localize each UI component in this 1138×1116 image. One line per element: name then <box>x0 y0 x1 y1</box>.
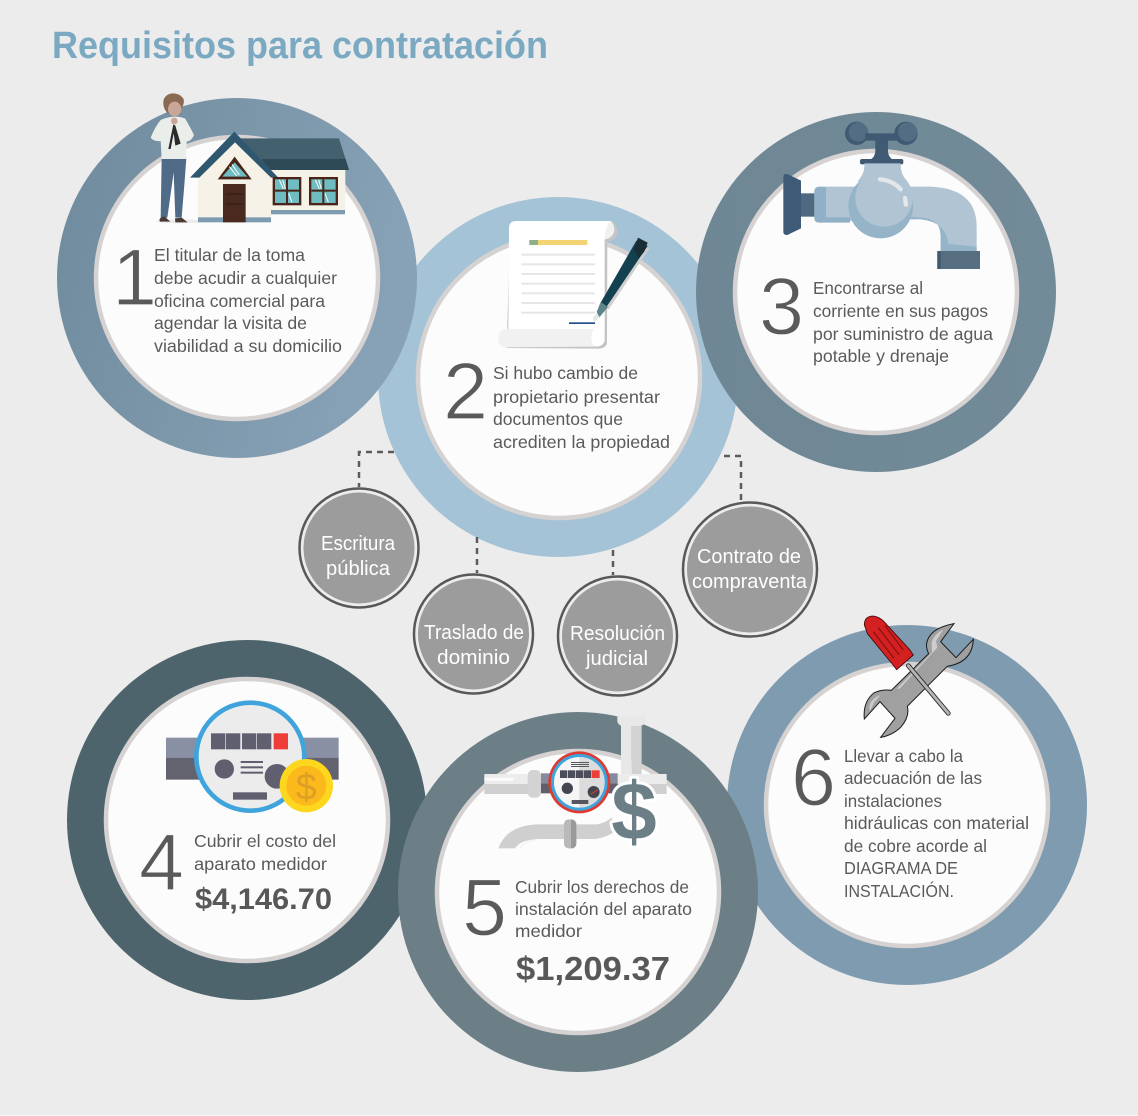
text: step 3: Encontrarse al <box>813 278 923 298</box>
icon: meter, pipes and dollar sign <box>484 717 667 858</box>
text: step 5: instalación del aparato <box>515 899 692 919</box>
text: step 4 <box>194 831 336 874</box>
price: step 4: $4,146.70 <box>195 883 332 916</box>
text: step 1 <box>154 245 342 356</box>
panel: step 4 <box>67 640 427 1000</box>
number 1: 1 <box>112 233 157 323</box>
disc: step 6 <box>766 664 1048 946</box>
text: step 6 <box>844 746 1029 901</box>
bubble: Contrato de compraventa: Contrato de <box>697 546 801 568</box>
bubble: Resolución judicial: judicial <box>585 648 648 670</box>
text: step 1: viabilidad a su domicilio <box>154 336 342 356</box>
text: step 2: propietario presentar <box>493 387 660 407</box>
text: step 6: DIAGRAMA DE <box>844 858 958 878</box>
bubble: Contrato de compraventa <box>683 502 817 636</box>
panel: step 5 <box>398 712 758 1072</box>
text: step 5 <box>515 877 692 941</box>
text: step 6: Llevar a cabo la <box>844 746 963 766</box>
bubble: Resolución judicial: Resolución <box>570 623 665 645</box>
bubble: Resolución judicial <box>558 576 677 696</box>
bubble: Traslado de dominio <box>414 574 533 694</box>
text: step 2: documentos que <box>493 409 623 429</box>
number 6: 6 <box>791 733 836 823</box>
text: step 4: Cubrir el costo del <box>194 831 336 851</box>
ring: step 6 <box>727 625 1087 985</box>
bubble: Traslado de dominio: Traslado de <box>424 622 524 644</box>
ring: step 5 <box>398 712 758 1072</box>
ring: step 3 <box>696 112 1056 472</box>
panel: step 3 <box>696 112 1056 472</box>
panel: step 2 <box>378 197 738 557</box>
text: step 1: El titular de la toma <box>154 245 305 265</box>
bubble: Traslado de dominio: dominio <box>437 647 510 669</box>
text: step 3 <box>813 278 993 366</box>
text: step 5: medidor <box>515 921 582 941</box>
ring: step 4 <box>67 640 427 1000</box>
text: step 3: por suministro de agua <box>813 324 993 344</box>
bubble: Escritura pública <box>300 488 418 608</box>
icon: water tap <box>783 122 980 269</box>
disc: step 5 <box>437 751 719 1033</box>
text: step 6: instalaciones <box>844 791 942 811</box>
panel: step 1 <box>57 93 417 458</box>
text: step 3: corriente en sus pagos <box>813 301 988 321</box>
disc: step 1 <box>96 137 378 419</box>
text: step 1: oficina comercial para <box>154 291 325 311</box>
icon: meter, pipes and dollar sign: $ <box>611 767 657 858</box>
title: Requisitos para contratación <box>52 25 548 67</box>
text: step 4: aparato medidor <box>194 854 327 874</box>
icon: water meter and coin <box>166 703 339 812</box>
disc: step 4 <box>106 679 388 961</box>
text: step 3: potable y drenaje <box>813 346 949 366</box>
bubble: Escritura pública: Escritura <box>321 533 396 555</box>
number 2: 2 <box>443 347 488 437</box>
panel: step 6 <box>727 616 1087 985</box>
connectors: dashed lines <box>359 452 741 575</box>
text: step 2 <box>493 363 670 452</box>
ring: step 2 <box>378 197 738 557</box>
text: step 1: agendar la visita de <box>154 313 307 333</box>
text: step 2: Si hubo cambio de <box>493 363 638 383</box>
bubble: Escritura pública: pública <box>326 558 391 580</box>
text: step 5: Cubrir los derechos de <box>515 877 689 897</box>
text: step 1: debe acudir a cualquier <box>154 268 337 288</box>
number 5: 5 <box>462 863 507 953</box>
icon: man and house <box>151 93 349 223</box>
text: step 6: adecuación de las <box>844 768 982 788</box>
disc: step 2 <box>418 236 700 518</box>
number 4: 4 <box>139 818 184 908</box>
text: step 2: acrediten la propiedad <box>493 432 670 452</box>
text: step 6: INSTALACIÓN. <box>844 880 954 901</box>
icon: wrench and screwdriver <box>864 616 973 737</box>
icon: document and pen <box>498 221 649 349</box>
price: step 5: $1,209.37 <box>516 950 670 987</box>
number 3: 3 <box>759 262 804 352</box>
text: step 6: hidráulicas con material <box>844 813 1029 833</box>
bubble: Contrato de compraventa: compraventa <box>692 571 808 593</box>
disc: step 3 <box>735 151 1017 433</box>
text: step 6: de cobre acorde al <box>844 836 987 856</box>
ring: step 1 <box>57 98 417 458</box>
icon: water meter and coin: $ <box>296 765 317 807</box>
